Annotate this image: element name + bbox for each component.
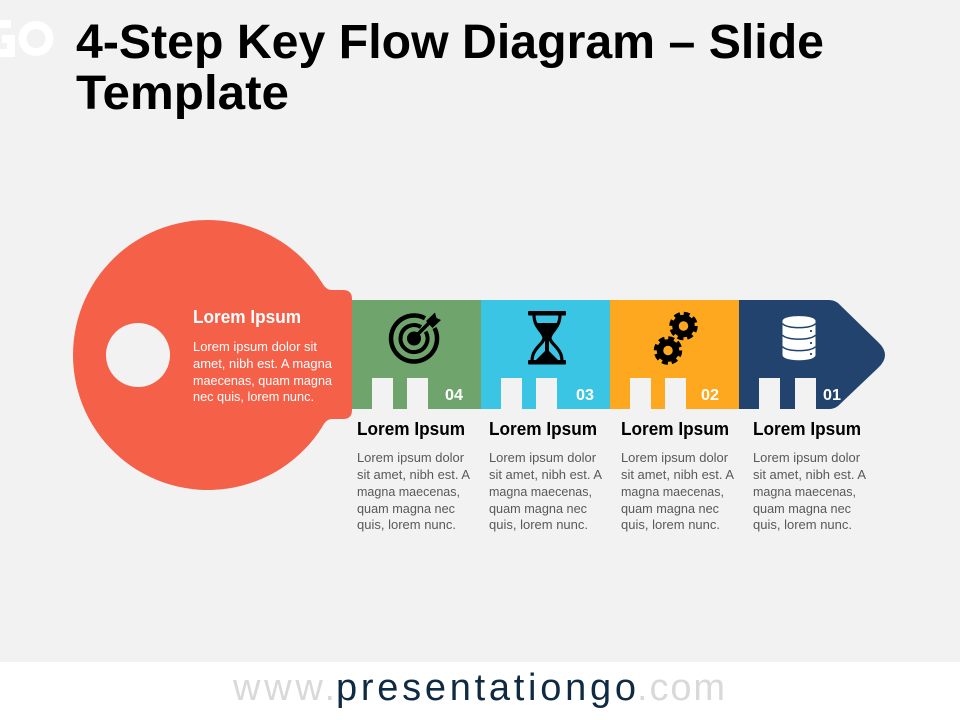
title: Template — [76, 67, 289, 120]
step 02 text: Lorem Ipsum — [621, 419, 729, 439]
step 01 text — [753, 419, 867, 532]
step 04 text: Lorem ipsum dolor — [357, 451, 464, 465]
footer website text: www. — [232, 667, 335, 709]
step 03 text: Lorem ipsum dolor — [489, 451, 596, 465]
icon: target — [391, 312, 441, 362]
key head body text: maecenas, quam magna — [193, 374, 332, 388]
footer website text: presentationgo — [336, 667, 636, 709]
number 03: 03 — [576, 387, 594, 404]
step 01 text: quam magna nec — [753, 502, 851, 516]
step 02 segment — [610, 300, 739, 409]
footer website text: .com — [637, 667, 725, 709]
number 01: 01 — [823, 387, 841, 404]
step 03 text: quam magna nec — [489, 502, 587, 516]
icon: database — [782, 316, 816, 360]
step 01 text: sit amet, nibh est. A — [753, 468, 867, 482]
step 02 text: magna maecenas, — [621, 485, 724, 499]
step 02 text: quam magna nec — [621, 502, 719, 516]
step 01 text: Lorem Ipsum — [753, 419, 861, 439]
step 01 text: magna maecenas, — [753, 485, 856, 499]
step 01 text: quis, lorem nunc. — [753, 518, 852, 532]
step 04 text — [357, 419, 471, 532]
key head body text: amet, nibh est. A magna — [193, 357, 332, 371]
step 04 text: quis, lorem nunc. — [357, 518, 456, 532]
title — [76, 16, 824, 120]
key head title: Lorem Ipsum — [193, 307, 301, 327]
step 03 text — [489, 419, 603, 532]
icon: gears — [656, 314, 696, 363]
step 02 text: quis, lorem nunc. — [621, 518, 720, 532]
key head body text: nec quis, lorem nunc. — [193, 390, 314, 404]
step 01 text: Lorem ipsum dolor — [753, 451, 860, 465]
step 03 text: sit amet, nibh est. A — [489, 468, 603, 482]
step 01 arrow segment — [739, 300, 885, 409]
step 04 text: magna maecenas, — [357, 485, 460, 499]
logo fragment — [0, 24, 50, 53]
key head body text — [193, 340, 332, 404]
key head — [73, 220, 352, 490]
icon: hourglass — [528, 311, 566, 364]
step 03 text: quis, lorem nunc. — [489, 518, 588, 532]
key head body text: Lorem ipsum dolor sit — [193, 340, 318, 354]
step 04 text: Lorem Ipsum — [357, 419, 465, 439]
step 03 segment — [481, 300, 610, 409]
step 02 text: Lorem ipsum dolor — [621, 451, 728, 465]
step 04 text: quam magna nec — [357, 502, 455, 516]
step 02 text: sit amet, nibh est. A — [621, 468, 735, 482]
number 04: 04 — [445, 387, 463, 404]
step 03 text: magna maecenas, — [489, 485, 592, 499]
footer website text — [232, 667, 725, 709]
title: 4-Step Key Flow Diagram – Slide — [76, 16, 824, 69]
step 02 text — [621, 419, 735, 532]
step 03 text: Lorem Ipsum — [489, 419, 597, 439]
footer band — [0, 662, 960, 720]
step 04 segment — [352, 300, 481, 409]
step 04 text: sit amet, nibh est. A — [357, 468, 471, 482]
number 02: 02 — [701, 387, 719, 404]
